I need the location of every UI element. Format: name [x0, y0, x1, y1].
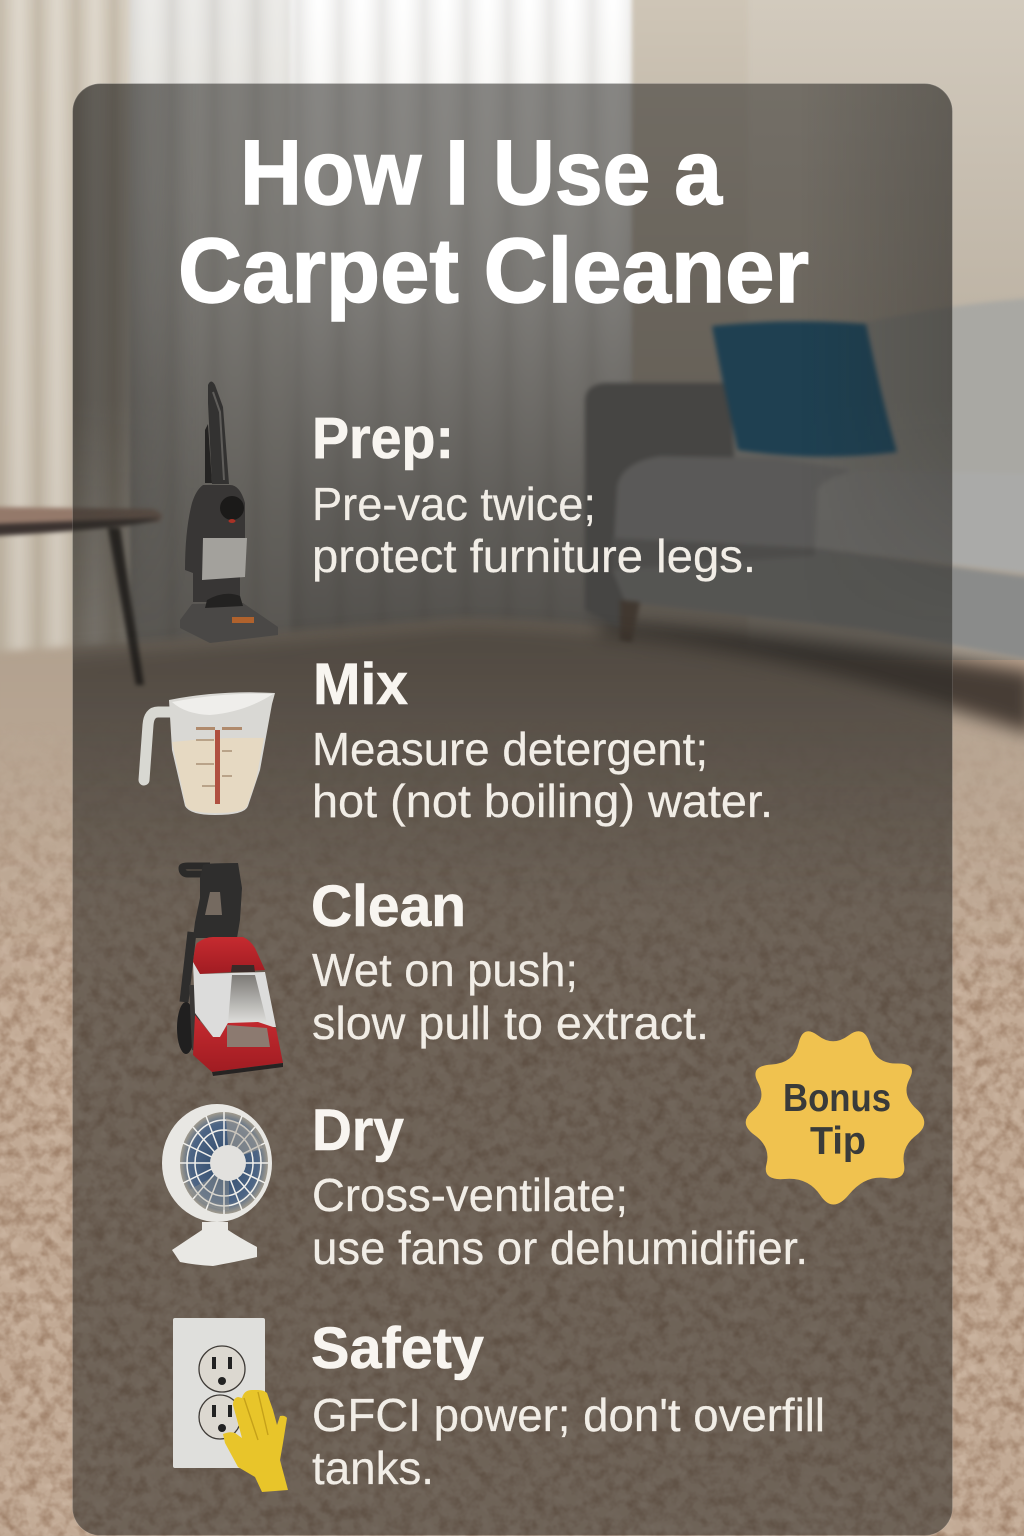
sofa	[585, 298, 1024, 660]
badge: Bonus Tip	[746, 1031, 924, 1205]
icon: upright vacuum	[180, 382, 278, 643]
heading: Safety: Safety	[311, 1316, 484, 1381]
text: Mix body: Measure detergent;	[312, 723, 708, 775]
title: Carpet Cleaner	[178, 220, 809, 322]
text: Prep body: protect furniture legs.	[312, 530, 756, 582]
text: Dry body	[312, 1169, 808, 1274]
text: Dry body: use fans or dehumidifier.	[312, 1222, 808, 1274]
badge: Bonus Tip: Bonus	[783, 1077, 891, 1120]
text: Safety body: GFCI power; don't overfill	[312, 1389, 825, 1441]
text: Dry body: Cross-ventilate;	[312, 1169, 628, 1221]
heading: Prep: Prep:	[312, 406, 454, 471]
text: Safety body	[312, 1389, 825, 1494]
text: Prep body	[312, 478, 756, 582]
text: Mix body: hot (not boiling) water.	[312, 775, 773, 827]
badge: Bonus Tip: Tip	[810, 1120, 866, 1163]
heading: Dry: Dry	[312, 1098, 404, 1163]
title: How I Use a	[240, 122, 723, 224]
text: Safety body: tanks.	[312, 1442, 434, 1494]
icon: measuring cup	[144, 692, 275, 815]
side table	[0, 507, 162, 685]
heading: Clean: Clean	[311, 874, 466, 939]
icon: carpet cleaner machine	[177, 863, 283, 1076]
text: Clean body: Wet on push;	[312, 944, 578, 996]
floor carpet	[0, 618, 1024, 1536]
icon: wall outlet with yellow glove	[173, 1318, 288, 1492]
text: Mix body	[312, 723, 773, 827]
text: Prep body: Pre-vac twice;	[312, 478, 596, 530]
text: Clean body: slow pull to extract.	[312, 997, 709, 1049]
shadow below sofa	[600, 622, 1024, 735]
title	[178, 122, 809, 322]
heading: Mix: Mix	[313, 652, 408, 717]
icon: desk fan	[162, 1104, 272, 1266]
text: Clean body	[312, 944, 709, 1049]
curtains and sheer window panel	[0, 0, 748, 660]
